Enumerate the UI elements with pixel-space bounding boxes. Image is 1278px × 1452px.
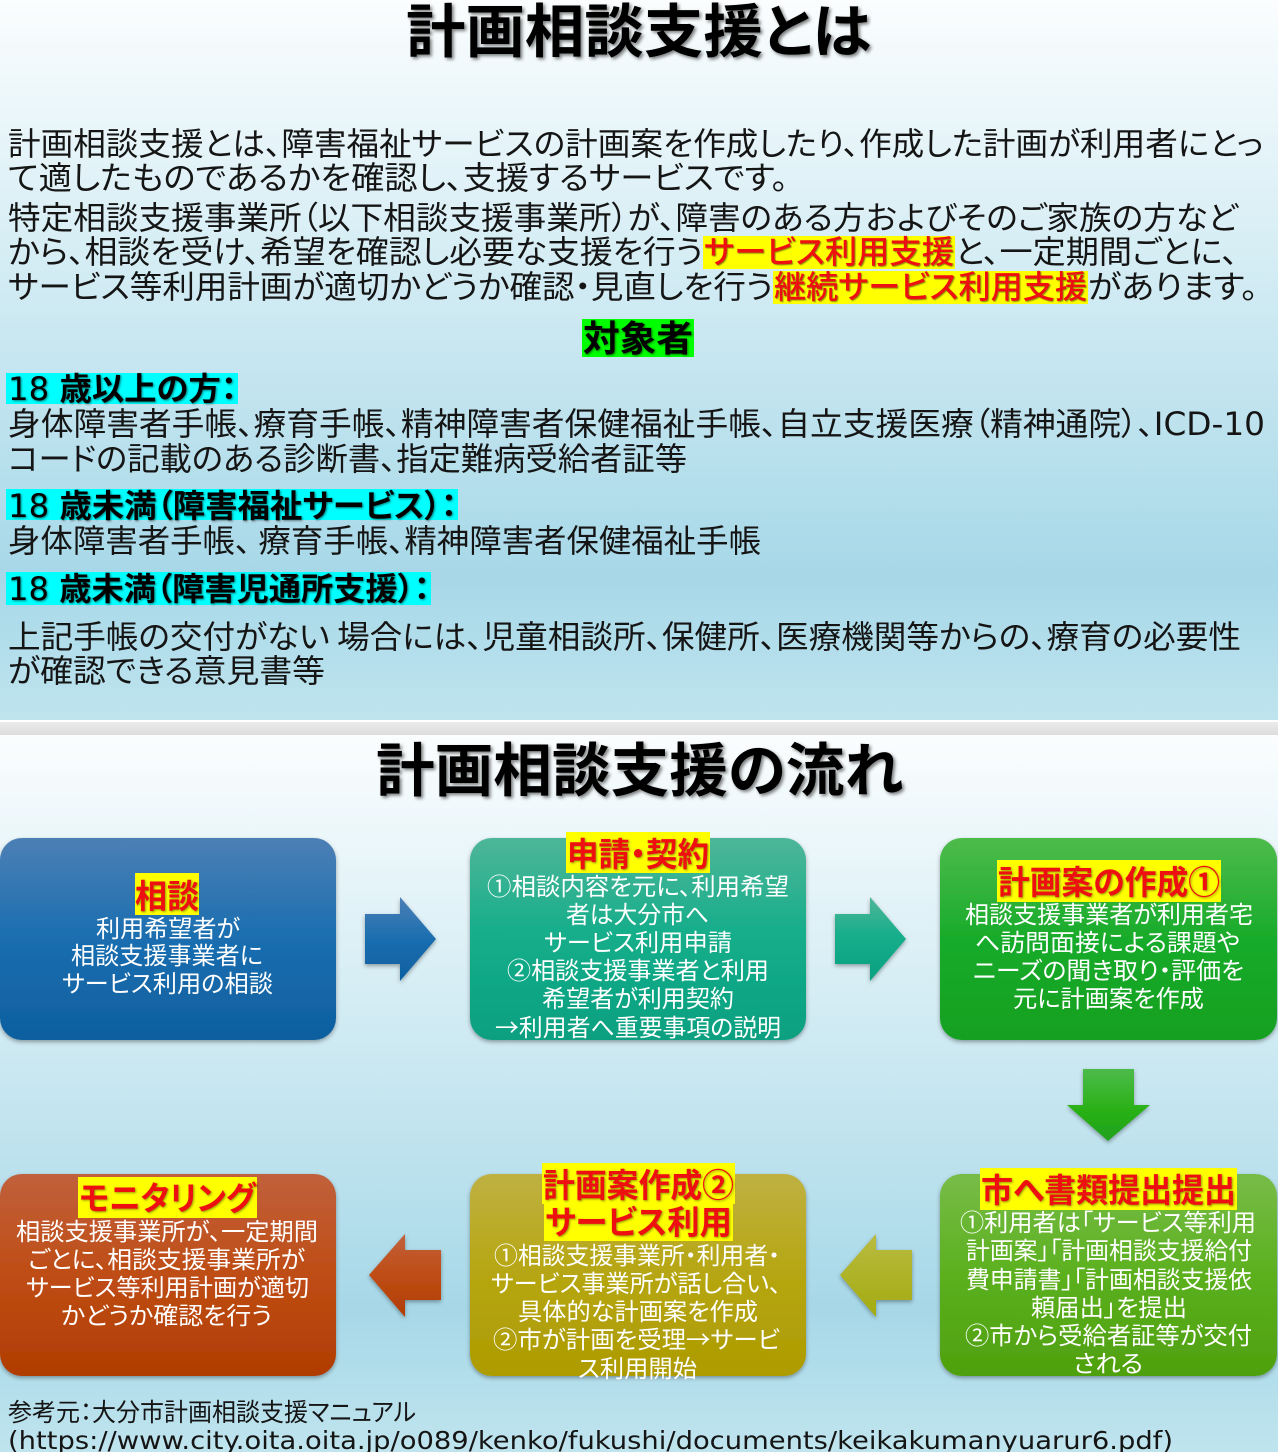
step: monitoring: 相談支援事業所が、一定期間 [16,1212,318,1247]
target group: 18 and over: 身体障害者手帳、療育手帳、精神障害者保健福祉手帳、自立支援医療（精神通院）、 ICD-10 [8,399,1265,445]
target group: 18 and over: 18 歳以上の方： [8,364,237,410]
step: draft plan 1: 相談支援事業者が利用者宅 [965,895,1253,930]
target group: under 18 welfare services [6,481,761,562]
step: consultation [0,838,336,1040]
service description paragraph: 特定相談支援事業所（以下相談支援事業所）が、障害のある方およびそのご家族の方など [8,193,1240,239]
step: application and contract: ②相談支援事業者と利用 [507,951,769,986]
step: draft plan 1: 元に計画案を作成 [1013,979,1204,1014]
step: monitoring: モニタリング [79,1172,258,1220]
service description paragraph: があります。 [1088,262,1258,308]
source reference [8,1393,1173,1452]
panel: what is plan consultation support [0,0,1278,721]
target group: under 18 child day support: が確認できる意見書等 [8,646,325,692]
divider band [0,720,1278,735]
step: monitoring [0,1172,336,1376]
step: monitoring: ごとに、相談支援事業所が [28,1240,305,1275]
target group: 18 and over [6,364,1265,480]
step: draft plan 1: へ訪問面接による課題や [975,923,1240,958]
panel: flow of plan consultation support [0,724,1278,1452]
step: submit documents to city: 計画案」「計画相談支援給付 [966,1231,1252,1266]
heading: target persons: 対象者 [583,310,693,362]
step: draft plan 2 and service use: ②市が計画を受理→サービ [493,1320,780,1355]
step: application and contract: 申請・契約 [567,828,709,876]
arrow: step 5 to 6 [369,1234,441,1317]
intro paragraph [8,119,1263,199]
service description paragraph: サービス等利用計画が適切かどうか確認・見直しを行う [8,262,773,308]
step: application and contract: 者は大分市へ [566,895,709,930]
step: submit documents to city [940,1164,1277,1379]
step: draft plan 1: ニーズの聞き取り・評価を [973,951,1244,986]
step: draft plan 2 and service use: 計画案作成② [543,1159,734,1207]
arrow: step 1 to 2 [365,897,436,981]
arrow: step 3 to 4 [1067,1069,1150,1141]
step: submit documents to city: 市へ書類提出提出 [981,1164,1236,1212]
service description paragraph: と、一定期間ごとに、 [955,227,1238,273]
target group: under 18 child day support: 18 歳未満（障害児通所支援）： [8,564,430,610]
step: submit documents to city: される [1073,1344,1143,1379]
step: draft plan 2 and service use [470,1159,806,1384]
flow title: 計画相談支援の流れ [376,724,903,808]
source reference: 参考元：大分市計画相談支援マニュアル [8,1393,416,1429]
step: monitoring: かどうか確認を行う [61,1296,272,1331]
step: consultation: 相談 [135,870,199,918]
step: application and contract [470,828,806,1043]
step: draft plan 1 [940,838,1277,1040]
step: draft plan 1: 計画案の作成① [998,856,1220,904]
service description paragraph: から、相談を受け、希望を確認し必要な支援を行う [8,227,703,273]
target group: 18 and over: コードの記載のある診断書、指定難病受給者証等 [8,434,687,480]
step: submit documents to city: 頼届出」を提出 [1031,1288,1187,1323]
arrow: step 4 to 5 [840,1234,912,1317]
step: draft plan 2 and service use: ①相談支援事業所・利用者・ [494,1236,780,1271]
step: submit documents to city: ②市から受給者証等が交付 [965,1316,1252,1351]
step: submit documents to city: ①利用者は「サービス等利用 [960,1203,1256,1238]
arrow: step 2 to 3 [835,897,906,981]
step: consultation: 利用希望者が [96,909,240,944]
step: consultation: 相談支援事業者に [71,936,263,971]
step: monitoring: サービス等利用計画が適切 [26,1268,309,1303]
target group: under 18 welfare services: 身体障害者手帳、 療育手帳、精神障害者保健福祉手帳 [8,516,761,562]
step: application and contract: ①相談内容を元に、利用希望 [487,867,789,902]
intro paragraph: て適したものであるかを確認し、支援するサービスです。 [8,153,788,199]
intro paragraph: 計画相談支援とは、障害福祉サービスの計画案を作成したり、作成した計画が利用者にとっ [8,119,1263,165]
step: consultation: サービス利用の相談 [62,964,273,999]
step: submit documents to city: 費申請書」「計画相談支援依 [966,1260,1252,1295]
service description paragraph: サービス利用支援 [704,227,954,273]
target group: under 18 child day support [6,564,1241,692]
step: draft plan 2 and service use: ス利用開始 [578,1349,697,1384]
step: draft plan 2 and service use: サービス利用 [545,1196,732,1244]
service description paragraph [8,193,1258,308]
step: application and contract: サービス利用申請 [544,923,732,958]
step: draft plan 2 and service use: 具体的な計画案を作成 [518,1292,758,1327]
target group: under 18 child day support: 上記手帳の交付がない 場合には、児童相談所、保健所、医療機関等からの、療育の必要性 [8,612,1241,658]
step: application and contract: 希望者が利用契約 [542,979,734,1014]
step: application and contract: →利用者へ重要事項の説明 [495,1008,781,1043]
service description paragraph: 継続サービス利用支援 [774,262,1087,308]
step: draft plan 2 and service use: サービス事業所が話し合い、 [491,1264,781,1299]
target group: under 18 welfare services: 18 歳未満（障害福祉サービス）： [8,481,457,527]
